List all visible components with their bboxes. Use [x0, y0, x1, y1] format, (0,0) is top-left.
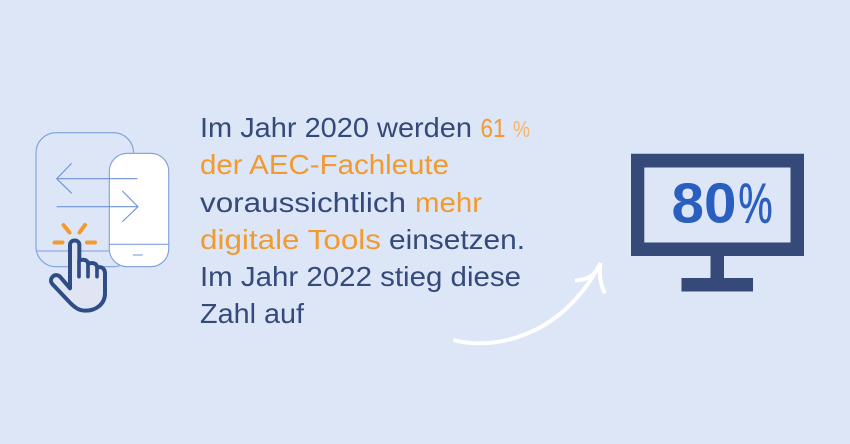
line 6: Zahl auf — [200, 298, 304, 329]
arrow: right — [57, 191, 138, 222]
line 4: einsetzen. — [389, 224, 525, 255]
arrow: left — [57, 163, 138, 193]
line 4: digitale Tools — [200, 224, 381, 255]
phone details — [109, 244, 169, 255]
icon: tablet and phone with tapping hand — [36, 133, 169, 311]
value: 80%: % — [738, 172, 772, 236]
line 1: % — [513, 116, 530, 142]
monitor frame — [631, 154, 804, 292]
icon: monitor with 80% — [631, 154, 804, 292]
line 1: 61 — [480, 113, 506, 143]
value: 80%: 80 — [672, 172, 736, 236]
phone outline — [109, 153, 169, 267]
tablet bottom line — [36, 250, 110, 252]
line 5: Im Jahr 2022 stieg diese — [200, 261, 521, 292]
icon: orange tap sparks — [54, 225, 95, 242]
arrow: curved white arrow to monitor — [454, 263, 605, 343]
line 3: mehr — [415, 187, 482, 218]
text block: main statement — [200, 112, 530, 329]
icon: hand — [51, 240, 105, 311]
line 3: voraussichtlich — [200, 187, 406, 218]
line 2: der AEC-Fachleute — [200, 149, 449, 180]
tablet outline — [36, 133, 134, 267]
line 1: Im Jahr 2020 werden — [200, 112, 472, 143]
